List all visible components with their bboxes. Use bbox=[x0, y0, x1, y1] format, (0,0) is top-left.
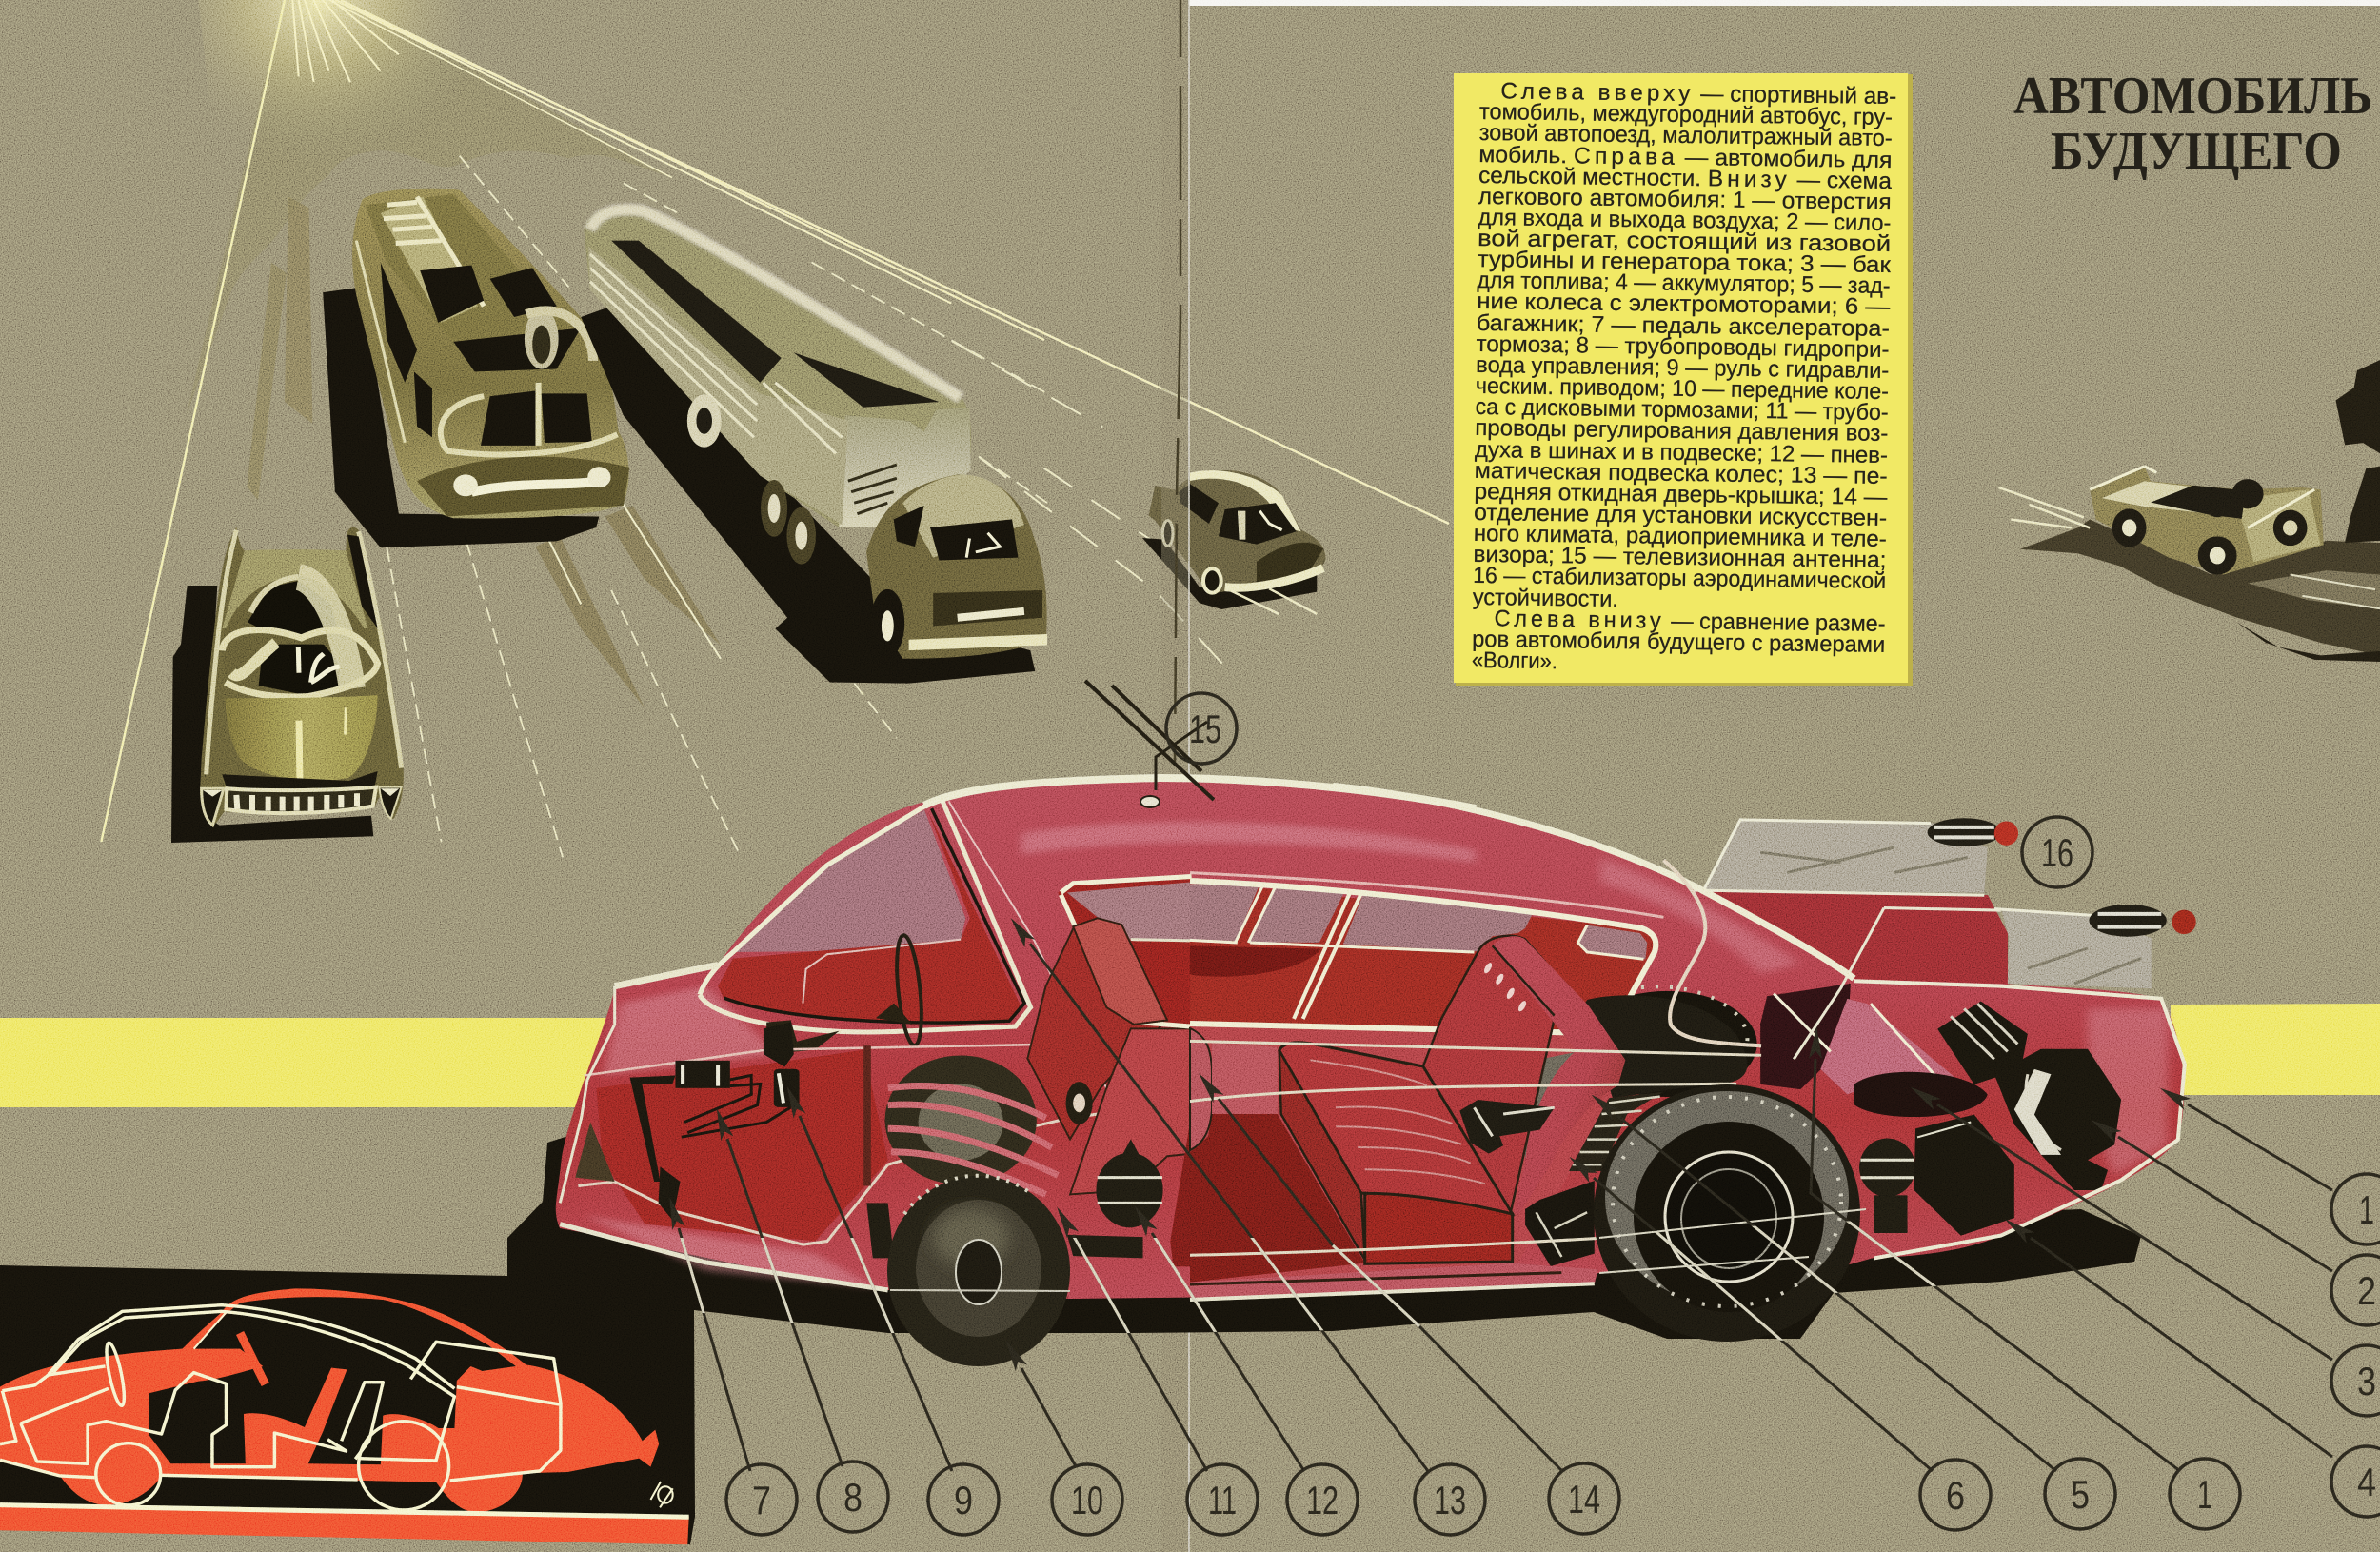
panel caption text: проводы регулирования давления воз- bbox=[1475, 415, 1889, 447]
artist signature bbox=[650, 1482, 673, 1507]
panel caption text: ров автомобиля будущего с размерами bbox=[1472, 627, 1885, 658]
lower sill bbox=[1190, 1263, 1598, 1300]
rear seat back side bbox=[1423, 936, 1577, 1212]
callout 13 bbox=[1415, 1464, 1485, 1535]
headlight light beam bbox=[101, 0, 1047, 857]
callout 7: 7 bbox=[752, 1478, 771, 1522]
panel caption text: духа в шинах и в подвеске; 12 — пнев- bbox=[1475, 437, 1888, 468]
panel caption text: вода управления; 9 — руль с гидравли- bbox=[1476, 352, 1889, 384]
panel caption text: для входа и выхода воздуха; 2 — сило- bbox=[1478, 205, 1892, 236]
callout 5: 5 bbox=[2071, 1472, 2090, 1517]
title: БУДУЩЕГО bbox=[2051, 122, 2342, 181]
callout 9 bbox=[928, 1464, 999, 1535]
callout 10: 10 bbox=[1071, 1478, 1103, 1522]
number callouts bbox=[726, 693, 2380, 1535]
rear bench cushion bbox=[1365, 1193, 1513, 1263]
comparison diagram: red car and white outline bbox=[0, 1288, 689, 1544]
battery bbox=[1914, 1115, 2014, 1236]
callout 11 bbox=[1187, 1464, 1258, 1535]
antenna bbox=[1085, 681, 1214, 807]
callout 6: 6 bbox=[1946, 1473, 1965, 1518]
far rear wheel bbox=[1577, 991, 1757, 1097]
panel caption text bbox=[1472, 78, 1896, 679]
firewall post bbox=[863, 1045, 871, 1186]
panel caption text: «Волги». bbox=[1472, 647, 1557, 674]
callout 1 bottom: 1 bbox=[2197, 1472, 2212, 1517]
callout 16: 16 bbox=[2041, 830, 2073, 875]
white outline of larger car bbox=[0, 1305, 689, 1517]
yellow road band left bbox=[0, 1018, 628, 1107]
window glass panes bbox=[1190, 884, 1647, 959]
far wheel behind door bbox=[1583, 995, 1747, 1098]
panel caption text: редняя откидная дверь-крышка; 14 — bbox=[1474, 479, 1888, 510]
panel caption text: мобиль. Справа — автомобиль для bbox=[1478, 142, 1893, 173]
panel caption text: са с дисковыми тормозами; 11 — трубо- bbox=[1475, 394, 1889, 426]
callout 5 bbox=[2045, 1459, 2115, 1529]
black comparison panel and car ground shadow bbox=[0, 1135, 2141, 1544]
callout 2 bbox=[2331, 1255, 2380, 1325]
panel caption text: Слева вверху — спортивный ав- bbox=[1500, 78, 1896, 109]
jeep bbox=[2090, 467, 2324, 575]
long beam rays to the right bbox=[335, 0, 1449, 524]
panel caption text: ного климата, радиоприемника и теле- bbox=[1474, 521, 1887, 552]
callout 1 right bbox=[2331, 1174, 2380, 1244]
body highlights bbox=[1600, 858, 2168, 1175]
callout 10 bbox=[1052, 1464, 1122, 1535]
panel caption text: сельской местности. Внизу — схема bbox=[1478, 163, 1893, 194]
air spring rear bbox=[1859, 1138, 1915, 1197]
sports car bbox=[171, 527, 404, 843]
callout 11: 11 bbox=[1208, 1478, 1237, 1522]
body highlights bbox=[585, 822, 1476, 1288]
rear door frame curve bbox=[1664, 860, 1761, 1045]
roofline highlight bbox=[924, 778, 1476, 808]
panel caption text: 16 — стабилизаторы аэродинамической bbox=[1473, 563, 1886, 594]
callout 15 bbox=[1166, 693, 1237, 764]
callout 9: 9 bbox=[954, 1478, 973, 1522]
book spine crease bbox=[1161, 0, 1190, 1552]
callout 8: 8 bbox=[843, 1475, 863, 1520]
yellow text panel bbox=[1454, 73, 1913, 686]
panel caption text: томобиль, междугородний автобус, гру- bbox=[1479, 99, 1893, 130]
panel caption text: отделение для установки искусствен- bbox=[1474, 500, 1887, 531]
bus bbox=[323, 189, 629, 547]
callout 12: 12 bbox=[1306, 1478, 1339, 1522]
callout 7 bbox=[726, 1464, 797, 1535]
red ground strip bbox=[0, 1506, 689, 1544]
panel caption text: турбины и генератора тока; 3 — бак bbox=[1478, 247, 1892, 278]
rear bench seat back bbox=[1279, 1043, 1513, 1214]
panel caption text: тормоза; 8 — трубопроводы гидропри- bbox=[1476, 331, 1890, 363]
body lines bbox=[615, 965, 718, 986]
panel caption text: багажник; 7 — педаль акселератора- bbox=[1477, 310, 1890, 342]
cabin floor bbox=[1190, 1114, 1365, 1283]
door panel bbox=[1493, 936, 1625, 1216]
lower red door area bbox=[597, 1050, 888, 1242]
engine turbine bbox=[1937, 1001, 2121, 1190]
radiator fins bbox=[1569, 1092, 1664, 1171]
panel caption text: визора; 15 — телевизионная антенна; bbox=[1473, 542, 1887, 573]
front seat back bbox=[1073, 918, 1167, 1025]
side window front part bbox=[1058, 877, 1192, 1026]
air spring suspension bbox=[1096, 1153, 1163, 1227]
cabin interior: window, seats, door, floor bbox=[1190, 860, 1761, 1300]
window frame bbox=[1190, 873, 1664, 1034]
side window dark lower bbox=[1190, 881, 1656, 1033]
callout 3 bbox=[2331, 1345, 2380, 1416]
panel caption text: матическая подвеска колес; 13 — пе- bbox=[1475, 458, 1888, 489]
callout 2: 2 bbox=[2357, 1268, 2376, 1313]
callout 15: 15 bbox=[1189, 706, 1221, 751]
shadow on window wall bbox=[1190, 945, 1321, 977]
floor front part bbox=[1170, 1109, 1210, 1266]
panel caption text: для топлива; 4 — аккумулятор; 5 — зад- bbox=[1477, 268, 1891, 299]
car body cutaway bbox=[556, 778, 2184, 1299]
arm rest bbox=[1459, 1100, 1555, 1154]
panel caption text: Слева внизу — сравнение разме- bbox=[1494, 606, 1886, 637]
callout arrows bbox=[679, 944, 2332, 1471]
callout 4: 4 bbox=[2357, 1460, 2376, 1504]
callout 4 bbox=[2331, 1446, 2380, 1517]
pale body lines bbox=[1190, 1041, 1761, 1255]
hydraulic lines bbox=[682, 1075, 791, 1137]
callout 13: 13 bbox=[1434, 1478, 1466, 1522]
rear wheel bbox=[1594, 1084, 1866, 1342]
articulated truck bbox=[581, 206, 1047, 684]
black cabin cutout bbox=[149, 1297, 516, 1464]
upper stabilizer fin bbox=[1703, 818, 2018, 893]
yellow road band right bbox=[2171, 1004, 2380, 1095]
panel caption text: устойчивости. bbox=[1473, 585, 1618, 612]
panel caption text: вой агрегат, состоящий из газовой bbox=[1478, 226, 1891, 257]
windshield frame bbox=[700, 799, 1106, 1088]
pedal and control rod bbox=[630, 1023, 800, 1220]
panel caption text: легкового автомобиля: 1 — отверстия bbox=[1478, 184, 1892, 215]
air intake bbox=[1760, 984, 1851, 1089]
windshield bbox=[733, 809, 965, 952]
lower stabilizer fin bbox=[1994, 905, 2196, 988]
callout 8 bbox=[818, 1462, 888, 1532]
horse silhouette bbox=[2336, 360, 2380, 453]
callout 16 bbox=[2022, 817, 2092, 887]
callout 3: 3 bbox=[2357, 1359, 2376, 1403]
red interior wall below window bbox=[1190, 1024, 1623, 1283]
rear frame lines bbox=[1694, 890, 2001, 1059]
title bbox=[2013, 67, 2372, 181]
panel caption text: ческим. приводом; 10 — передние коле- bbox=[1476, 373, 1889, 405]
callout 14 bbox=[1549, 1463, 1619, 1534]
lane lines near spine bbox=[952, 341, 1225, 667]
spare wheel with ribs bbox=[884, 1055, 1037, 1184]
far-side rear fender bbox=[1707, 891, 2008, 1000]
steering wheel bbox=[893, 935, 925, 1046]
callout 6 bbox=[1920, 1460, 1991, 1530]
pale arrow segments over shadow bbox=[680, 1221, 1936, 1341]
rear section of car: far wheel, intake, engine, battery bbox=[1333, 786, 2185, 1258]
front door panel bbox=[1027, 917, 1167, 1139]
callout 14: 14 bbox=[1568, 1477, 1600, 1522]
road bbox=[2020, 520, 2380, 655]
rural car scene with road and horse bbox=[1999, 360, 2380, 662]
small car bbox=[1142, 470, 1326, 614]
red car silhouette bbox=[0, 1288, 659, 1512]
front wheel bbox=[887, 1176, 1070, 1366]
callout 1 bottom bbox=[2170, 1459, 2240, 1529]
panel caption text: ние колеса с электромоторами; 6 — bbox=[1477, 289, 1890, 320]
panel caption text: зовой автопоезд, малолитражный авто- bbox=[1478, 120, 1893, 151]
rear suspension bbox=[1525, 1181, 1595, 1266]
front seat edge bbox=[1190, 1028, 1212, 1150]
front section of car: windshield, dash, pedals, spare wheel, seat bbox=[560, 778, 1476, 1290]
top page edge bbox=[1189, 0, 2380, 6]
callout 12 bbox=[1287, 1464, 1358, 1535]
speed lines bbox=[1999, 487, 2090, 527]
